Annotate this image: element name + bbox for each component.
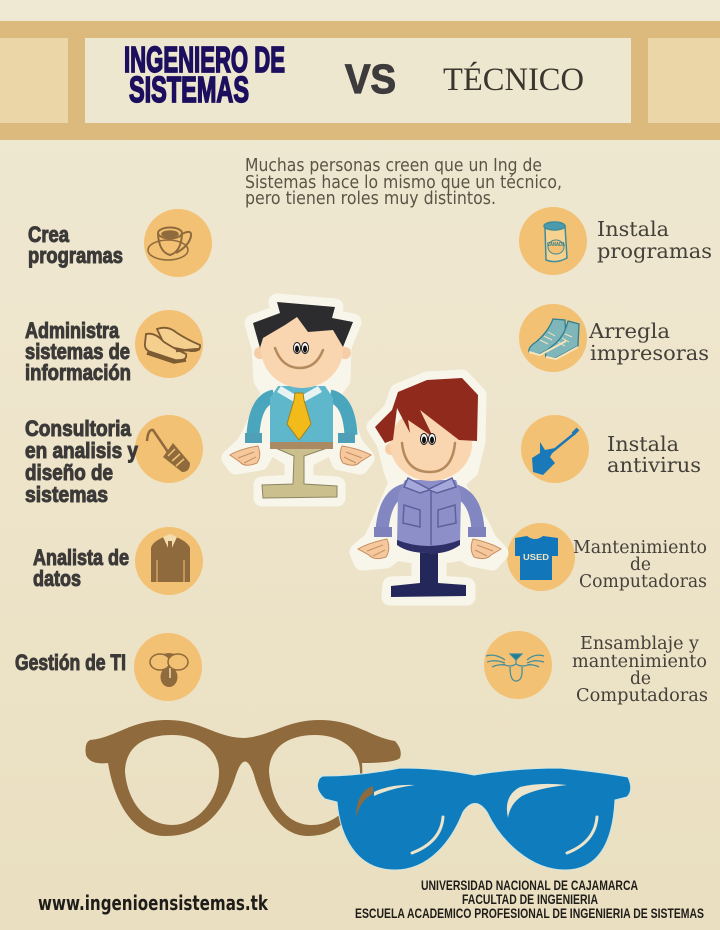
intro text: pero tienen roles muy distintos. [245, 189, 496, 209]
right item: instala antivirus [521, 415, 701, 483]
label: ensamblaje y mantenimiento: Ensamblaje y [580, 634, 699, 654]
icon: sneakers [529, 319, 579, 359]
label: ensamblaje y mantenimiento [572, 634, 708, 706]
right item: instala programas [519, 207, 712, 275]
brown glasses [86, 720, 401, 836]
label: consultoria [25, 416, 139, 507]
icon: cat face [486, 654, 544, 681]
icon: soda can [544, 222, 567, 262]
sticker outline [358, 378, 500, 597]
left item: crea programas [28, 209, 212, 277]
trousers and shoes [391, 550, 466, 597]
label: administra sistemas de informacion [25, 318, 131, 385]
eyes [420, 434, 436, 444]
right item: mantenimiento [507, 523, 707, 592]
left item: gestion de TI [15, 633, 202, 701]
right item: ensamblaje [484, 631, 708, 706]
intro text: Sistemas hace lo mismo que un técnico, [245, 173, 562, 193]
label: instala programas: Instala [597, 217, 669, 241]
icon: dress shoes [145, 328, 200, 362]
label: gestion de TI: Gestión de TI [15, 650, 126, 675]
label: arregla impresoras [588, 319, 709, 365]
icon: coffee cup [148, 228, 191, 260]
icon: used t-shirt: USED [523, 552, 549, 562]
character: engineer [230, 302, 371, 498]
icon: used t-shirt [515, 536, 558, 580]
label: mantenimiento de computadoras [573, 538, 707, 592]
label: instala antivirus [607, 432, 701, 477]
hair [253, 302, 353, 348]
shirt [270, 386, 333, 442]
left item: consultoria [25, 415, 203, 507]
hands [358, 539, 501, 559]
label: instala programas [597, 217, 712, 263]
smile [275, 348, 323, 368]
label: administra sistemas de informacion: Administra [25, 318, 120, 343]
label: ensamblaje y mantenimiento: de [630, 669, 651, 689]
ears and head [385, 443, 397, 455]
icon: soda can: CANADA [547, 242, 565, 248]
sticker outline [230, 302, 366, 498]
institution credits [355, 878, 704, 921]
label: consultoria: en analisis y [25, 438, 139, 463]
character: technician [358, 378, 501, 597]
label: crea programas: programas [28, 243, 123, 268]
label: crea programas: Crea [28, 222, 70, 247]
label: instala antivirus: antivirus [607, 453, 701, 477]
collar [277, 386, 322, 402]
left item: administra sistemas [25, 310, 203, 385]
website url: www.ingenioensistemas.tk [38, 891, 269, 915]
institution credits: FACULTAD DE INGENIERIA [462, 892, 598, 907]
label: administra sistemas de informacion: sistemas de [25, 339, 130, 364]
label: arregla impresoras: Arregla [588, 319, 670, 343]
vs label: VS [345, 56, 396, 102]
icon: electric guitar [532, 429, 578, 475]
blue sunglasses [317, 768, 631, 870]
cuffs [374, 527, 486, 537]
label: crea programas [28, 222, 123, 268]
arms [253, 396, 351, 435]
title: ingeniero de sistemas [124, 39, 285, 110]
icon: suit [151, 534, 190, 582]
tie [287, 393, 311, 440]
label: consultoria: sistemas [25, 482, 108, 507]
label: administra sistemas de informacion: información [25, 360, 131, 385]
ears and head [254, 347, 266, 359]
icon: glasses and moustache [150, 653, 188, 687]
label: analista de datos [33, 545, 129, 591]
hands [230, 446, 371, 465]
label: consultoria: Consultoria [25, 416, 132, 441]
label: ensamblaje y mantenimiento: mantenimiento [572, 652, 707, 672]
label: instala programas: programas [597, 239, 712, 263]
shirt [397, 480, 461, 553]
intro text: Muchas personas creen que un Ing de [245, 156, 542, 176]
title: ingeniero de sistemas: SISTEMAS [129, 69, 249, 110]
header banner [0, 21, 720, 140]
title: ingeniero de sistemas: INGENIERO DE [124, 39, 285, 80]
label: instala antivirus: Instala [607, 432, 679, 456]
eyes [294, 342, 308, 354]
label: ensamblaje y mantenimiento: Computadoras [576, 686, 708, 706]
collar and pockets [403, 478, 456, 545]
arms [382, 490, 478, 530]
label: analista de datos: datos [33, 566, 81, 591]
hair [375, 378, 478, 443]
label: arregla impresoras: impresoras [590, 341, 709, 365]
label: mantenimiento de computadoras: de [630, 555, 651, 575]
right item: arregla impresoras [519, 304, 709, 372]
lens highlights [374, 785, 415, 796]
left item: analista de datos [33, 527, 203, 595]
cuffs [245, 433, 355, 443]
belt [270, 440, 333, 449]
institution credits: UNIVERSIDAD NACIONAL DE CAJAMARCA [421, 878, 638, 893]
icon: saxophone [147, 430, 190, 472]
smile [402, 443, 455, 472]
shoes and trousers [262, 446, 337, 498]
label: mantenimiento de computadoras: Computadoras [579, 572, 707, 592]
intro text [245, 156, 562, 209]
title: tecnico: TÉCNICO [443, 61, 584, 98]
label: analista de datos: Analista de [33, 545, 129, 570]
label: consultoria: diseño de [25, 460, 113, 485]
label: mantenimiento de computadoras: Mantenimiento [573, 538, 707, 558]
